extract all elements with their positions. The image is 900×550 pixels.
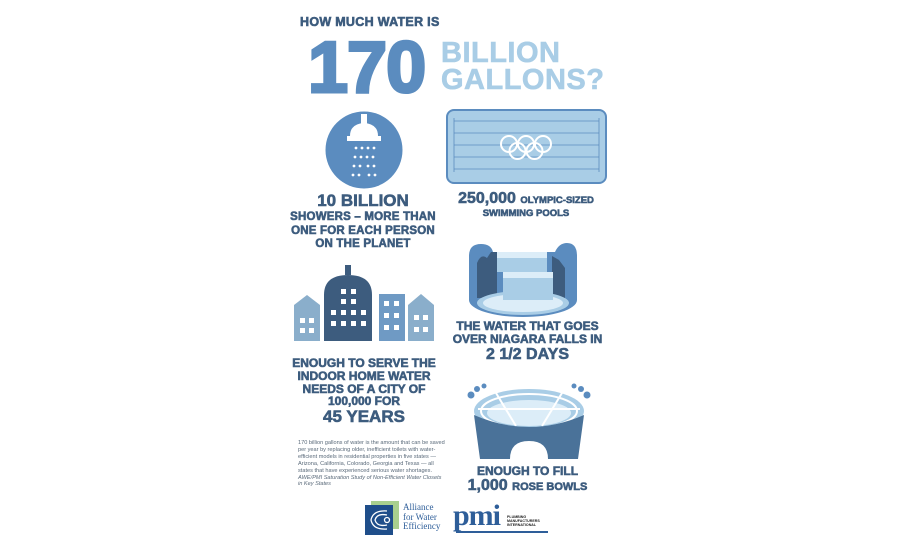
text: rose bowls: 1,000 ROSE BOWLS	[468, 477, 587, 494]
logo: alliance for water efficiency	[365, 501, 440, 535]
icon: shower	[326, 112, 402, 188]
text: 250,000 olympic pools: SWIMMING POOLS	[483, 208, 569, 219]
icon: niagara falls	[469, 243, 577, 317]
logo: alliance for water efficiency: Alliance	[403, 502, 434, 512]
text: city water needs: ENOUGH TO SERVE THE INDOOR HOME WATER NEEDS OF A CITY OF 100,000 FOR	[292, 356, 436, 408]
text: 250,000 olympic pools: 250,000 OLYMPIC-SIZED	[458, 190, 594, 207]
logo: pmi	[453, 499, 548, 533]
text: niagara falls: 2 1/2 DAYS	[486, 346, 569, 363]
logo: alliance for water efficiency: for Water	[403, 512, 437, 522]
text: city water needs: 45 YEARS	[323, 407, 405, 426]
icon: stadium	[468, 384, 590, 459]
logo: pmi: INTERNATIONAL	[507, 523, 536, 527]
heading: billion gallons	[441, 37, 604, 96]
logo: pmi: MANUFACTURERS	[507, 519, 540, 523]
text: 10 billion showers: 10 BILLION	[317, 191, 409, 210]
heading: billion gallons: GALLONS?	[441, 64, 604, 96]
logo: alliance for water efficiency: Efficiency	[403, 521, 440, 531]
text: niagara falls: OVER NIAGARA FALLS IN	[453, 332, 602, 346]
text: rose bowls: ENOUGH TO FILL	[477, 464, 578, 478]
footnote text: 170 billion gallons of water is the amount that can be saved per year by replacing older, inefficient toilets with water-efficient models in residential properties in five states — Arizona, California, Colorado, Georgia and Texas — all states that have experienced serious water shortages.	[298, 440, 445, 474]
text: 250,000 olympic pools	[458, 190, 594, 219]
text: niagara falls: THE WATER THAT GOES	[456, 319, 599, 333]
big number 170: 170	[308, 28, 425, 108]
text: niagara falls	[452, 319, 602, 363]
text: 10 billion showers	[290, 191, 436, 250]
heading: billion gallons: BILLION	[441, 37, 560, 69]
icon: city buildings	[294, 265, 434, 341]
logo: pmi: pmi	[453, 499, 500, 532]
heading: how much water is: HOW MUCH WATER IS	[300, 15, 440, 29]
text: rose bowls	[468, 464, 588, 494]
icon: swimming pool	[446, 109, 607, 184]
footnote text: AWE/PMI Saturation Study of Non-Efficient Water Closets in Key States	[298, 475, 441, 487]
logo: pmi: PLUMBING	[507, 515, 526, 519]
text: 10 billion showers: SHOWERS – MORE THAN ONE FOR EACH PERSON ON THE PLANET	[290, 211, 436, 250]
